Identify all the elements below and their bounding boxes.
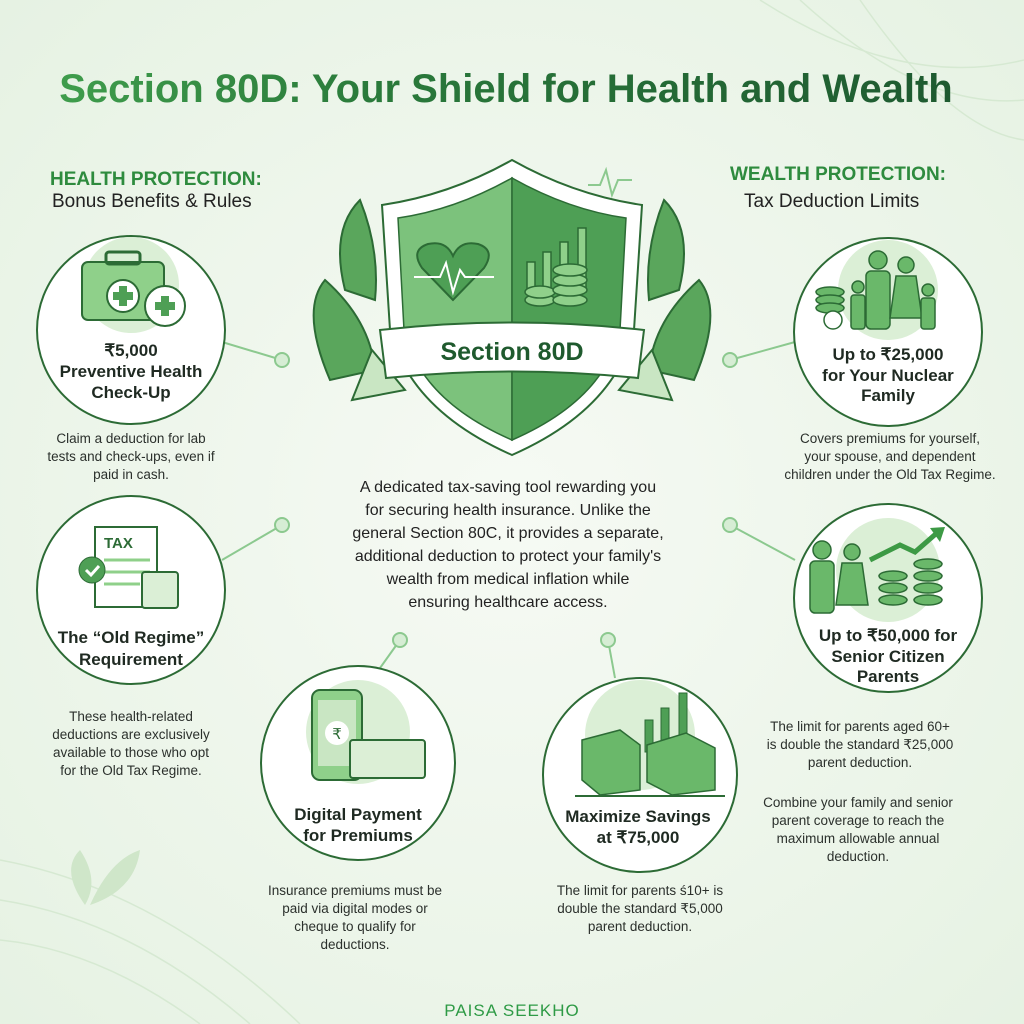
text: old regime desc: for the Old Tax Regime. [60,763,202,778]
text: nuclear desc: your spouse, and dependent [804,449,976,464]
shield emblem [314,160,710,455]
panel: digital payment: for Premiums [303,826,413,845]
shield emblem: Section 80D [440,338,584,366]
text: digital desc: deductions. [320,937,390,952]
text: nuclear desc [784,431,996,482]
icon: decorative leaf [71,850,140,905]
panel: preventive health: Check-Up [91,383,171,402]
panel: maximize savings [543,678,737,872]
footer brand: PAISA SEEKHO [444,1001,580,1020]
panel: old regime: The “Old Regime” [58,628,204,647]
central description: ensuring healthcare access. [408,594,608,611]
panel: preventive health [37,236,225,424]
text: maximize desc: The limit for parents ś10+ is [557,883,723,898]
panel: nuclear family: for Your Nuclear [822,366,954,385]
panel: digital payment: Digital Payment [294,805,422,824]
icon: heart [417,243,489,300]
text: senior desc: is double the standard ₹25,000 [767,737,953,752]
text: old regime desc [52,709,210,778]
text: nuclear desc: children under the Old Tax Regime. [784,467,996,482]
panel: digital payment [261,666,455,860]
panel: preventive health: Preventive Health [60,362,202,381]
central description: general Section 80C, it provides a separate, [352,525,664,542]
text: old regime desc: These health-related [69,709,193,724]
icon: coins and bars [525,228,587,306]
central description: for securing health insurance. Unlike the [365,502,651,519]
title: Section 80D: Your Shield for Health and Wealth [59,67,953,111]
text: digital desc: cheque to qualify for [294,919,416,934]
text: combine desc: parent coverage to reach the [772,813,944,828]
text: nuclear desc: Covers premiums for yourself, [800,431,980,446]
panel: digital payment: ₹ [332,726,342,743]
panel: nuclear family: Family [861,386,915,405]
text: digital desc: Insurance premiums must be [268,883,442,898]
central description: A dedicated tax-saving tool rewarding you [360,479,656,496]
text: maximize desc: double the standard ₹5,000 [557,901,723,916]
connectors [222,342,795,678]
heading: health protection [50,169,262,212]
text: preventive desc [47,431,215,482]
panel: senior parents: Senior Citizen [831,647,945,666]
panel: maximize savings: at ₹75,000 [597,828,679,847]
panel: senior parents [794,504,982,692]
text: senior desc: parent deduction. [808,755,912,770]
text: digital desc: paid via digital modes or [282,901,428,916]
central description: additional deduction to protect your family's [355,548,661,565]
central description: wealth from medical inflation while [386,571,629,588]
panel: senior parents: Parents [857,667,919,686]
text: old regime desc: deductions are exclusively [52,727,210,742]
heading: wealth protection: WEALTH PROTECTION: [730,164,946,185]
text: preventive desc: paid in cash. [93,467,169,482]
banner [352,350,672,400]
panel: senior parents: Up to ₹50,000 for [819,626,958,645]
panel: maximize savings: Maximize Savings [565,807,711,826]
heading: health protection: HEALTH PROTECTION: [50,169,262,190]
panel: preventive health: ₹5,000 [104,341,158,360]
text: combine desc: Combine your family and senior [763,795,953,810]
panel: old regime [37,496,225,684]
text: old regime desc: available to those who opt [53,745,209,760]
text: preventive desc: Claim a deduction for lab [56,431,206,446]
text: combine desc: maximum allowable annual [777,831,939,846]
central description [352,479,664,611]
text: combine desc: deduction. [827,849,889,864]
panel: old regime: Requirement [79,650,183,669]
text: combine desc [763,795,953,864]
heading: wealth protection: Tax Deduction Limits [744,191,919,212]
text: preventive desc: tests and check-ups, even if [47,449,215,464]
panel: nuclear family [794,238,982,426]
panel: old regime: TAX [104,535,133,552]
text: senior desc: The limit for parents aged 60+ [770,719,950,734]
panel: nuclear family: Up to ₹25,000 [833,345,943,364]
text: maximize desc: parent deduction. [588,919,692,934]
heading: wealth protection [730,164,946,212]
heading: health protection: Bonus Benefits & Rules [52,191,252,212]
text: digital desc [268,883,442,952]
text: maximize desc [557,883,723,934]
text: senior desc [767,719,953,770]
